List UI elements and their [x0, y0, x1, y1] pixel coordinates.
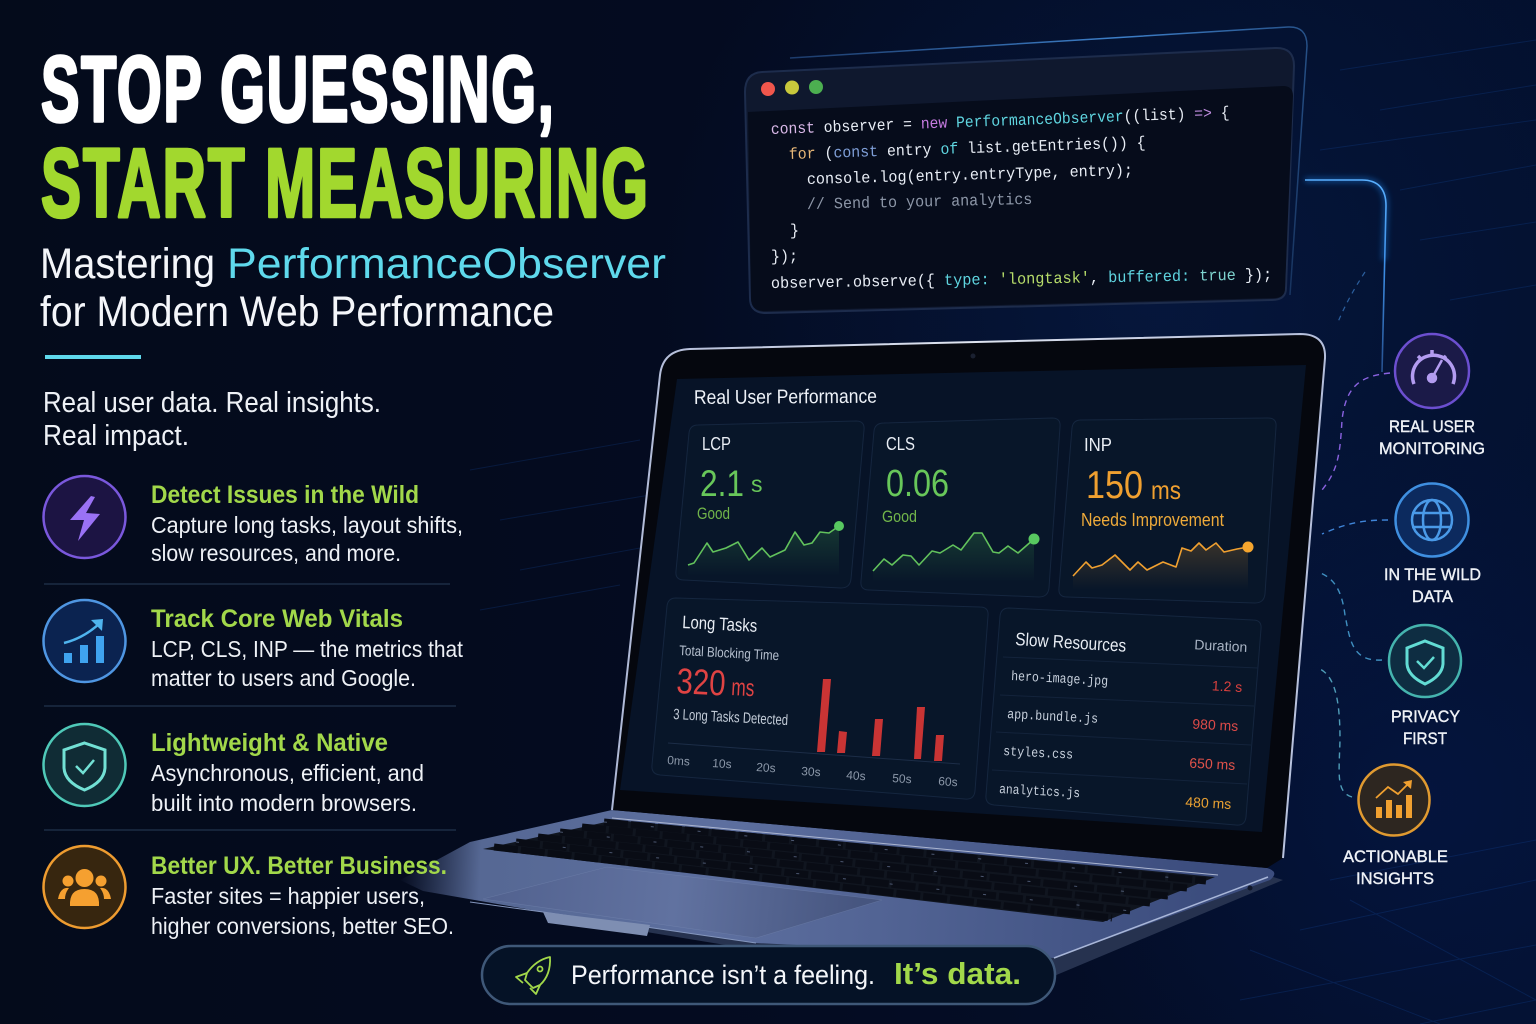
badge: real user monitoring: REAL USER: [1389, 417, 1475, 436]
subtitle: Mastering: [40, 240, 215, 288]
laptop base: [400, 334, 1325, 976]
metric card: CLS: Good: [882, 507, 917, 526]
metric card: INP: INP: [1084, 435, 1112, 455]
title: [41, 38, 648, 238]
metric card: CLS: CLS: [886, 434, 915, 454]
metric card: LCP: [676, 421, 864, 588]
code text: });: [771, 248, 798, 266]
panel: slow resources: styles.css: [1003, 745, 1073, 764]
lid frame: [612, 334, 1325, 868]
feature: detect issues: Capture long tasks, layout shifts,: [151, 512, 463, 538]
subtitle: for Modern Web Performance: [40, 288, 554, 336]
connector: dashed blue: [1322, 520, 1388, 534]
feature: detect issues: [44, 476, 463, 566]
feature: lightweight: Lightweight & Native: [151, 729, 388, 757]
badge: real user monitoring: MONITORING: [1379, 439, 1485, 458]
thumb notch: [543, 912, 650, 936]
metric card: INP: ms: [1151, 475, 1181, 505]
badge: privacy first: [1389, 625, 1461, 748]
feature: better ux: [44, 846, 454, 939]
feature: core web vitals: Track Core Web Vitals: [151, 605, 403, 633]
feature: better ux: Better UX. Better Business.: [151, 852, 447, 880]
code text: [771, 104, 1272, 293]
title: START MEASURING: [41, 130, 648, 238]
code text: console.log(entry.entryType, entry);: [807, 162, 1133, 189]
panel: slow resources: 980 ms: [1192, 716, 1239, 734]
code text: // Send to your analytics: [807, 190, 1033, 214]
metric card: LCP: 2.1: [700, 463, 744, 504]
panel: slow resources: app.bundle.js: [1007, 708, 1098, 728]
metric card: INP: Needs Improvement: [1081, 510, 1224, 530]
tagline: Real impact.: [43, 420, 189, 452]
connector: dashed amber: [1318, 668, 1352, 797]
subtitle: PerformanceObserver: [227, 240, 666, 288]
code text: const observer = new PerformanceObserver((list) => {: [771, 104, 1230, 139]
code text: }: [790, 222, 799, 240]
badge: actionable insights: INSIGHTS: [1356, 869, 1434, 888]
metric card: CLS: [861, 418, 1060, 597]
metric card: INP: [1059, 418, 1276, 603]
icon: rocket: [516, 957, 550, 994]
feature: better ux: Faster sites = happier users,: [151, 883, 425, 909]
badge: privacy first: PRIVACY: [1391, 707, 1460, 726]
panel: slow resources: Duration: [1194, 636, 1248, 655]
axis labels: 30s: [801, 764, 821, 779]
metric card: CLS: 0.06: [886, 463, 949, 505]
connector: code window to monitoring: [1305, 180, 1386, 372]
panel: long tasks: Total Blocking Time: [679, 642, 780, 663]
feature: core web vitals: matter to users and Google.: [151, 665, 416, 691]
code editor body: [748, 86, 1293, 311]
screen panel: [620, 365, 1306, 832]
callout: tagline pill: Performance isn’t a feeling.: [571, 960, 875, 990]
code text: for (const entry of list.getEntries()) {: [789, 134, 1146, 164]
code text: observer.observe({ type: 'longtask', buffered: true });: [771, 266, 1272, 293]
window dots: [761, 80, 823, 96]
icon: shield check: [44, 724, 126, 806]
panel: long tasks: [652, 598, 988, 799]
tagline: Real user data. Real insights.: [43, 387, 381, 419]
feature: core web vitals: [44, 600, 464, 691]
panel: slow resources: [986, 608, 1261, 825]
feature: lightweight: built into modern browsers.: [151, 790, 417, 816]
icon: bar chart with arrow: [1376, 780, 1412, 818]
keyboard: [483, 818, 1218, 922]
code window: [745, 27, 1307, 313]
sparkline: INP: [1073, 542, 1254, 590]
axis labels: 50s: [892, 771, 912, 786]
panel: long tasks: Long Tasks: [682, 612, 758, 636]
panel: long tasks: ms: [731, 674, 755, 702]
feature: better ux: higher conversions, better SEO.: [151, 913, 454, 939]
callout: tagline pill: It’s data.: [894, 956, 1021, 991]
panel: slow resources: analytics.js: [999, 783, 1080, 802]
subtitle: [40, 240, 666, 336]
connector: dashed purple: [1322, 373, 1390, 490]
panel: slow resources: hero-image.jpg: [1011, 670, 1108, 690]
tagline: [43, 387, 381, 452]
panel: long tasks: 320: [676, 660, 727, 704]
callout: tagline pill: [482, 946, 1055, 1004]
axis labels: 40s: [846, 768, 866, 783]
icon: globe: [1412, 500, 1452, 540]
metric card: INP: 150: [1086, 464, 1143, 507]
badge: actionable insights: [1343, 764, 1448, 888]
accent divider: [45, 355, 141, 359]
feature: core web vitals: LCP, CLS, INP — the metrics that: [151, 636, 464, 662]
bar chart: [817, 679, 944, 761]
badge: real user monitoring: [1379, 334, 1485, 458]
feature: lightweight: Asynchronous, efficient, and: [151, 760, 424, 786]
panel: long tasks: 3 Long Tasks Detected: [673, 706, 789, 729]
chart axis: [668, 743, 960, 764]
axis labels: 60s: [938, 774, 958, 789]
metric card: LCP: LCP: [702, 434, 731, 454]
feature: lightweight: [44, 724, 424, 816]
icon: shield check: [1407, 641, 1443, 684]
metric card: LCP: s: [751, 471, 762, 497]
dashboard title: Real User Performance: [694, 386, 877, 409]
camera: [970, 354, 976, 358]
icon: users: [44, 846, 126, 928]
axis labels: 10s: [712, 756, 732, 771]
metric card: LCP: Good: [697, 504, 730, 523]
sparkline: CLS: [873, 533, 1040, 582]
badge: actionable insights: ACTIONABLE: [1343, 847, 1448, 866]
axis labels: 0ms: [667, 753, 690, 769]
sparkline: LCP: [688, 521, 844, 576]
panel: slow resources: Slow Resources: [1015, 629, 1127, 656]
badge: privacy first: FIRST: [1403, 729, 1447, 748]
badge: in the wild data: DATA: [1412, 587, 1454, 606]
panel: slow resources: 650 ms: [1189, 755, 1236, 773]
icon: growth chart: [44, 600, 126, 682]
connector: dashed teal: [1318, 572, 1382, 660]
title: STOP GUESSING,: [41, 38, 554, 141]
icon: gauge: [1412, 350, 1455, 384]
axis labels: 20s: [756, 760, 776, 775]
badge: in the wild data: [1384, 484, 1481, 606]
trackpad: [483, 867, 882, 938]
icon: lightning bolt: [44, 476, 126, 558]
badge: in the wild data: IN THE WILD: [1384, 565, 1481, 584]
feature: detect issues: slow resources, and more.: [151, 540, 401, 566]
panel: slow resources: 1.2 s: [1212, 677, 1243, 695]
axis labels: [667, 753, 958, 789]
panel: slow resources: 480 ms: [1185, 794, 1232, 812]
feature: detect issues: Detect Issues in the Wild: [151, 481, 419, 509]
